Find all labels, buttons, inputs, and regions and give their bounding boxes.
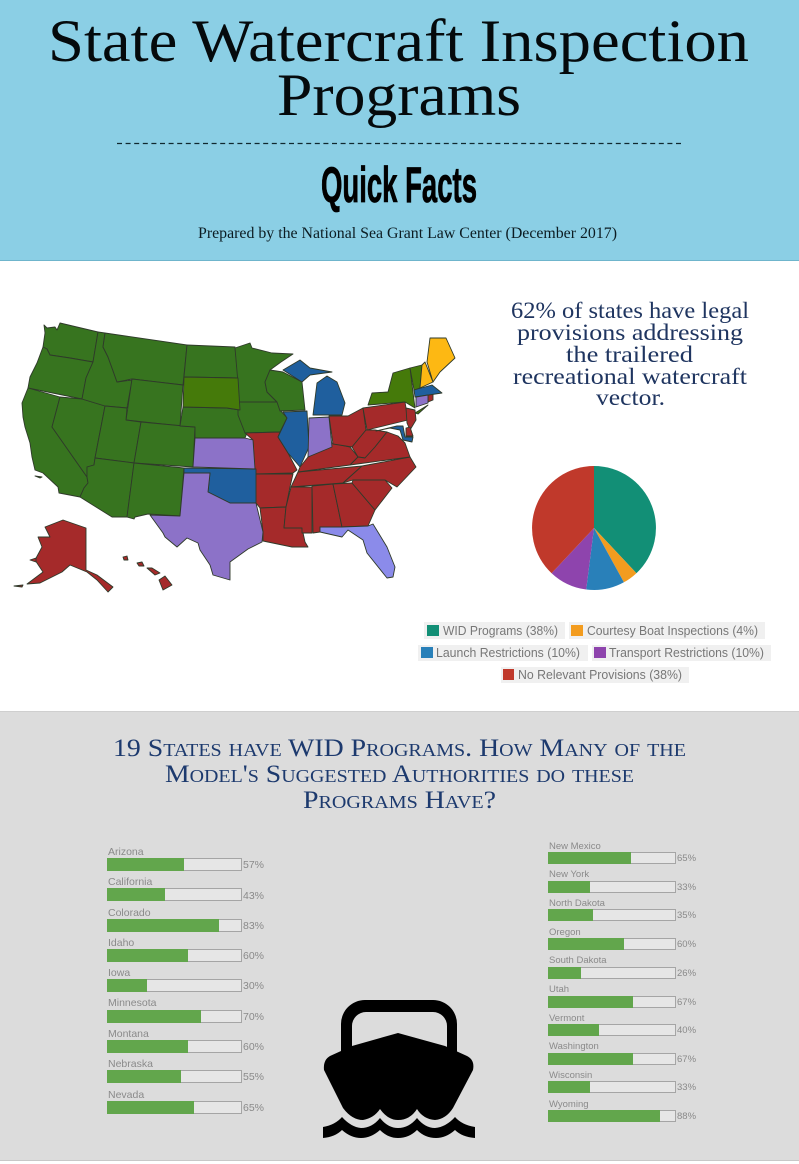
bar chart: right column: Oregon xyxy=(549,927,581,938)
panel: header xyxy=(0,0,799,261)
pie legend: WID Programs (38%) xyxy=(443,624,558,638)
bar chart: right column: 88% xyxy=(677,1111,697,1122)
bar chart: left column: Montana xyxy=(108,1028,149,1040)
bar chart: left column: Nevada xyxy=(108,1089,144,1101)
bar chart: right column: 67% xyxy=(677,1054,697,1065)
states with WID programs xyxy=(22,323,305,519)
bar chart: right column: 33% xyxy=(677,1082,697,1093)
bar chart: left column xyxy=(107,846,264,1114)
bar chart: right column: 60% xyxy=(677,939,697,950)
bar chart: left column: 60% xyxy=(243,1041,264,1053)
bar chart: left column: California xyxy=(108,876,153,888)
states with no relevant provisions xyxy=(14,394,433,592)
bar chart: left column: 30% xyxy=(243,980,264,992)
statistic text xyxy=(511,298,749,410)
bar chart: right column: New York xyxy=(549,869,589,880)
statistic text: vector. xyxy=(596,385,665,410)
states with transport restrictions xyxy=(150,395,428,580)
bar chart: right column: North Dakota xyxy=(549,898,606,909)
bar chart: right column: Washington xyxy=(549,1041,599,1052)
pie legend: Transport Restrictions (10%) xyxy=(609,646,764,660)
pie legend: No Relevant Provisions (38%) xyxy=(518,668,682,682)
bar chart: right column: Wyoming xyxy=(549,1099,589,1110)
bar chart: left column: 57% xyxy=(243,859,264,871)
statistic text: 62% of states have legal xyxy=(511,298,749,323)
section heading xyxy=(113,735,686,814)
bar chart: left column: 43% xyxy=(243,890,264,902)
florida xyxy=(320,524,395,578)
bar chart: left column: Arizona xyxy=(108,846,144,858)
bar chart: left column: 55% xyxy=(243,1071,264,1083)
section heading: Model's Suggested Authorities do these xyxy=(165,761,634,788)
bar chart: right column: South Dakota xyxy=(549,955,607,966)
pie legend xyxy=(418,622,771,683)
bar chart: left column: 70% xyxy=(243,1011,264,1023)
states with courtesy inspections xyxy=(420,338,455,388)
statistic text: the trailered xyxy=(566,342,694,367)
states with darker green WID programs xyxy=(183,365,428,414)
section heading: 19 States have WID Programs. How Many of the xyxy=(113,735,686,762)
pie chart xyxy=(532,466,656,590)
bar chart: left column: Nebraska xyxy=(108,1058,153,1070)
pie legend: Launch Restrictions (10%) xyxy=(436,646,580,660)
bar chart: right column: 65% xyxy=(677,853,697,864)
bar chart: right column: 26% xyxy=(677,968,697,979)
bar chart: right column: 67% xyxy=(677,997,697,1008)
panel: US map xyxy=(14,323,455,592)
states with launch restrictions xyxy=(184,360,442,503)
bar chart: left column: 83% xyxy=(243,920,264,932)
pie legend: Courtesy Boat Inspections (4%) xyxy=(587,624,758,638)
title xyxy=(48,8,749,128)
statistic text: recreational watercraft xyxy=(513,364,748,389)
bar chart: right column: Utah xyxy=(549,984,569,995)
bar chart: left column: 65% xyxy=(243,1102,264,1114)
bar chart: right column: 40% xyxy=(677,1025,697,1036)
bar chart: right column: New Mexico xyxy=(549,841,601,852)
credit line: Prepared by the National Sea Grant Law Center (December 2017) xyxy=(198,225,617,242)
california channel islands xyxy=(35,476,42,478)
title: State Watercraft Inspection xyxy=(48,8,749,74)
bar chart: right column: 33% xyxy=(677,882,697,893)
bar chart: left column: Iowa xyxy=(108,967,130,979)
icon: boat xyxy=(323,1000,475,1138)
bar chart: left column: Minnesota xyxy=(108,997,157,1009)
section heading: Programs Have? xyxy=(303,787,496,814)
bar chart: right column xyxy=(548,841,697,1122)
statistic text: provisions addressing xyxy=(517,320,744,345)
title: Programs xyxy=(277,62,521,128)
bar chart: right column: Wisconsin xyxy=(549,1070,592,1081)
bar chart: right column: Vermont xyxy=(549,1013,585,1024)
panel: WID programs xyxy=(0,711,799,1161)
bar chart: left column: 60% xyxy=(243,950,264,962)
subtitle: quick facts: Quick Facts xyxy=(321,157,477,213)
bar chart: right column: 35% xyxy=(677,910,697,921)
bar chart: left column: Colorado xyxy=(108,907,151,919)
bar chart: left column: Idaho xyxy=(108,937,134,949)
